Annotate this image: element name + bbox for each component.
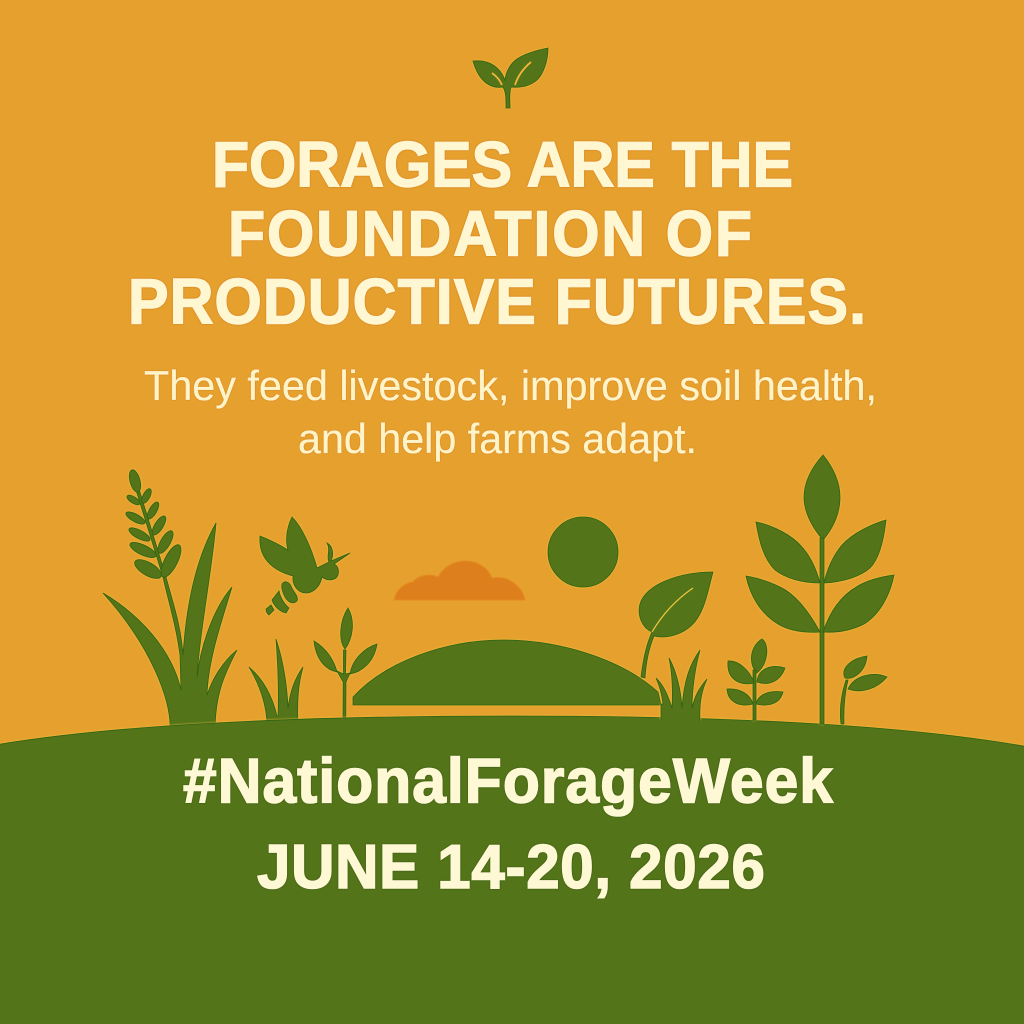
- icon: sun: [548, 517, 618, 587]
- icon: cloud: [394, 561, 525, 600]
- hashtag: #NationalForageWeek: [183, 746, 834, 817]
- icon: bee: [260, 517, 350, 615]
- title: PRODUCTIVE FUTURES.: [128, 266, 866, 338]
- icon: broad leaf: [639, 572, 713, 678]
- icon: grass tuft: [656, 650, 707, 722]
- date: JUNE 14-20, 2026: [257, 832, 765, 901]
- icon: tall grass with seed head: [103, 469, 237, 732]
- icon: large plant: [746, 455, 894, 724]
- icon: sprout: [473, 48, 548, 108]
- ground cover hiding plant bases: [0, 718, 1024, 1024]
- ground and hill: [0, 640, 1024, 1024]
- title: FOUNDATION OF: [228, 198, 752, 270]
- subtitle: [144, 362, 877, 462]
- title: [128, 129, 866, 338]
- subtitle: and help farms adapt.: [298, 415, 697, 462]
- title: FORAGES ARE THE: [212, 129, 793, 201]
- icon: seedling: [314, 608, 377, 720]
- icon: small sprout: [840, 656, 887, 724]
- subtitle: They feed livestock, improve soil health,: [144, 362, 877, 409]
- icon: medium plant: [727, 639, 785, 720]
- icon: small grass: [249, 639, 303, 730]
